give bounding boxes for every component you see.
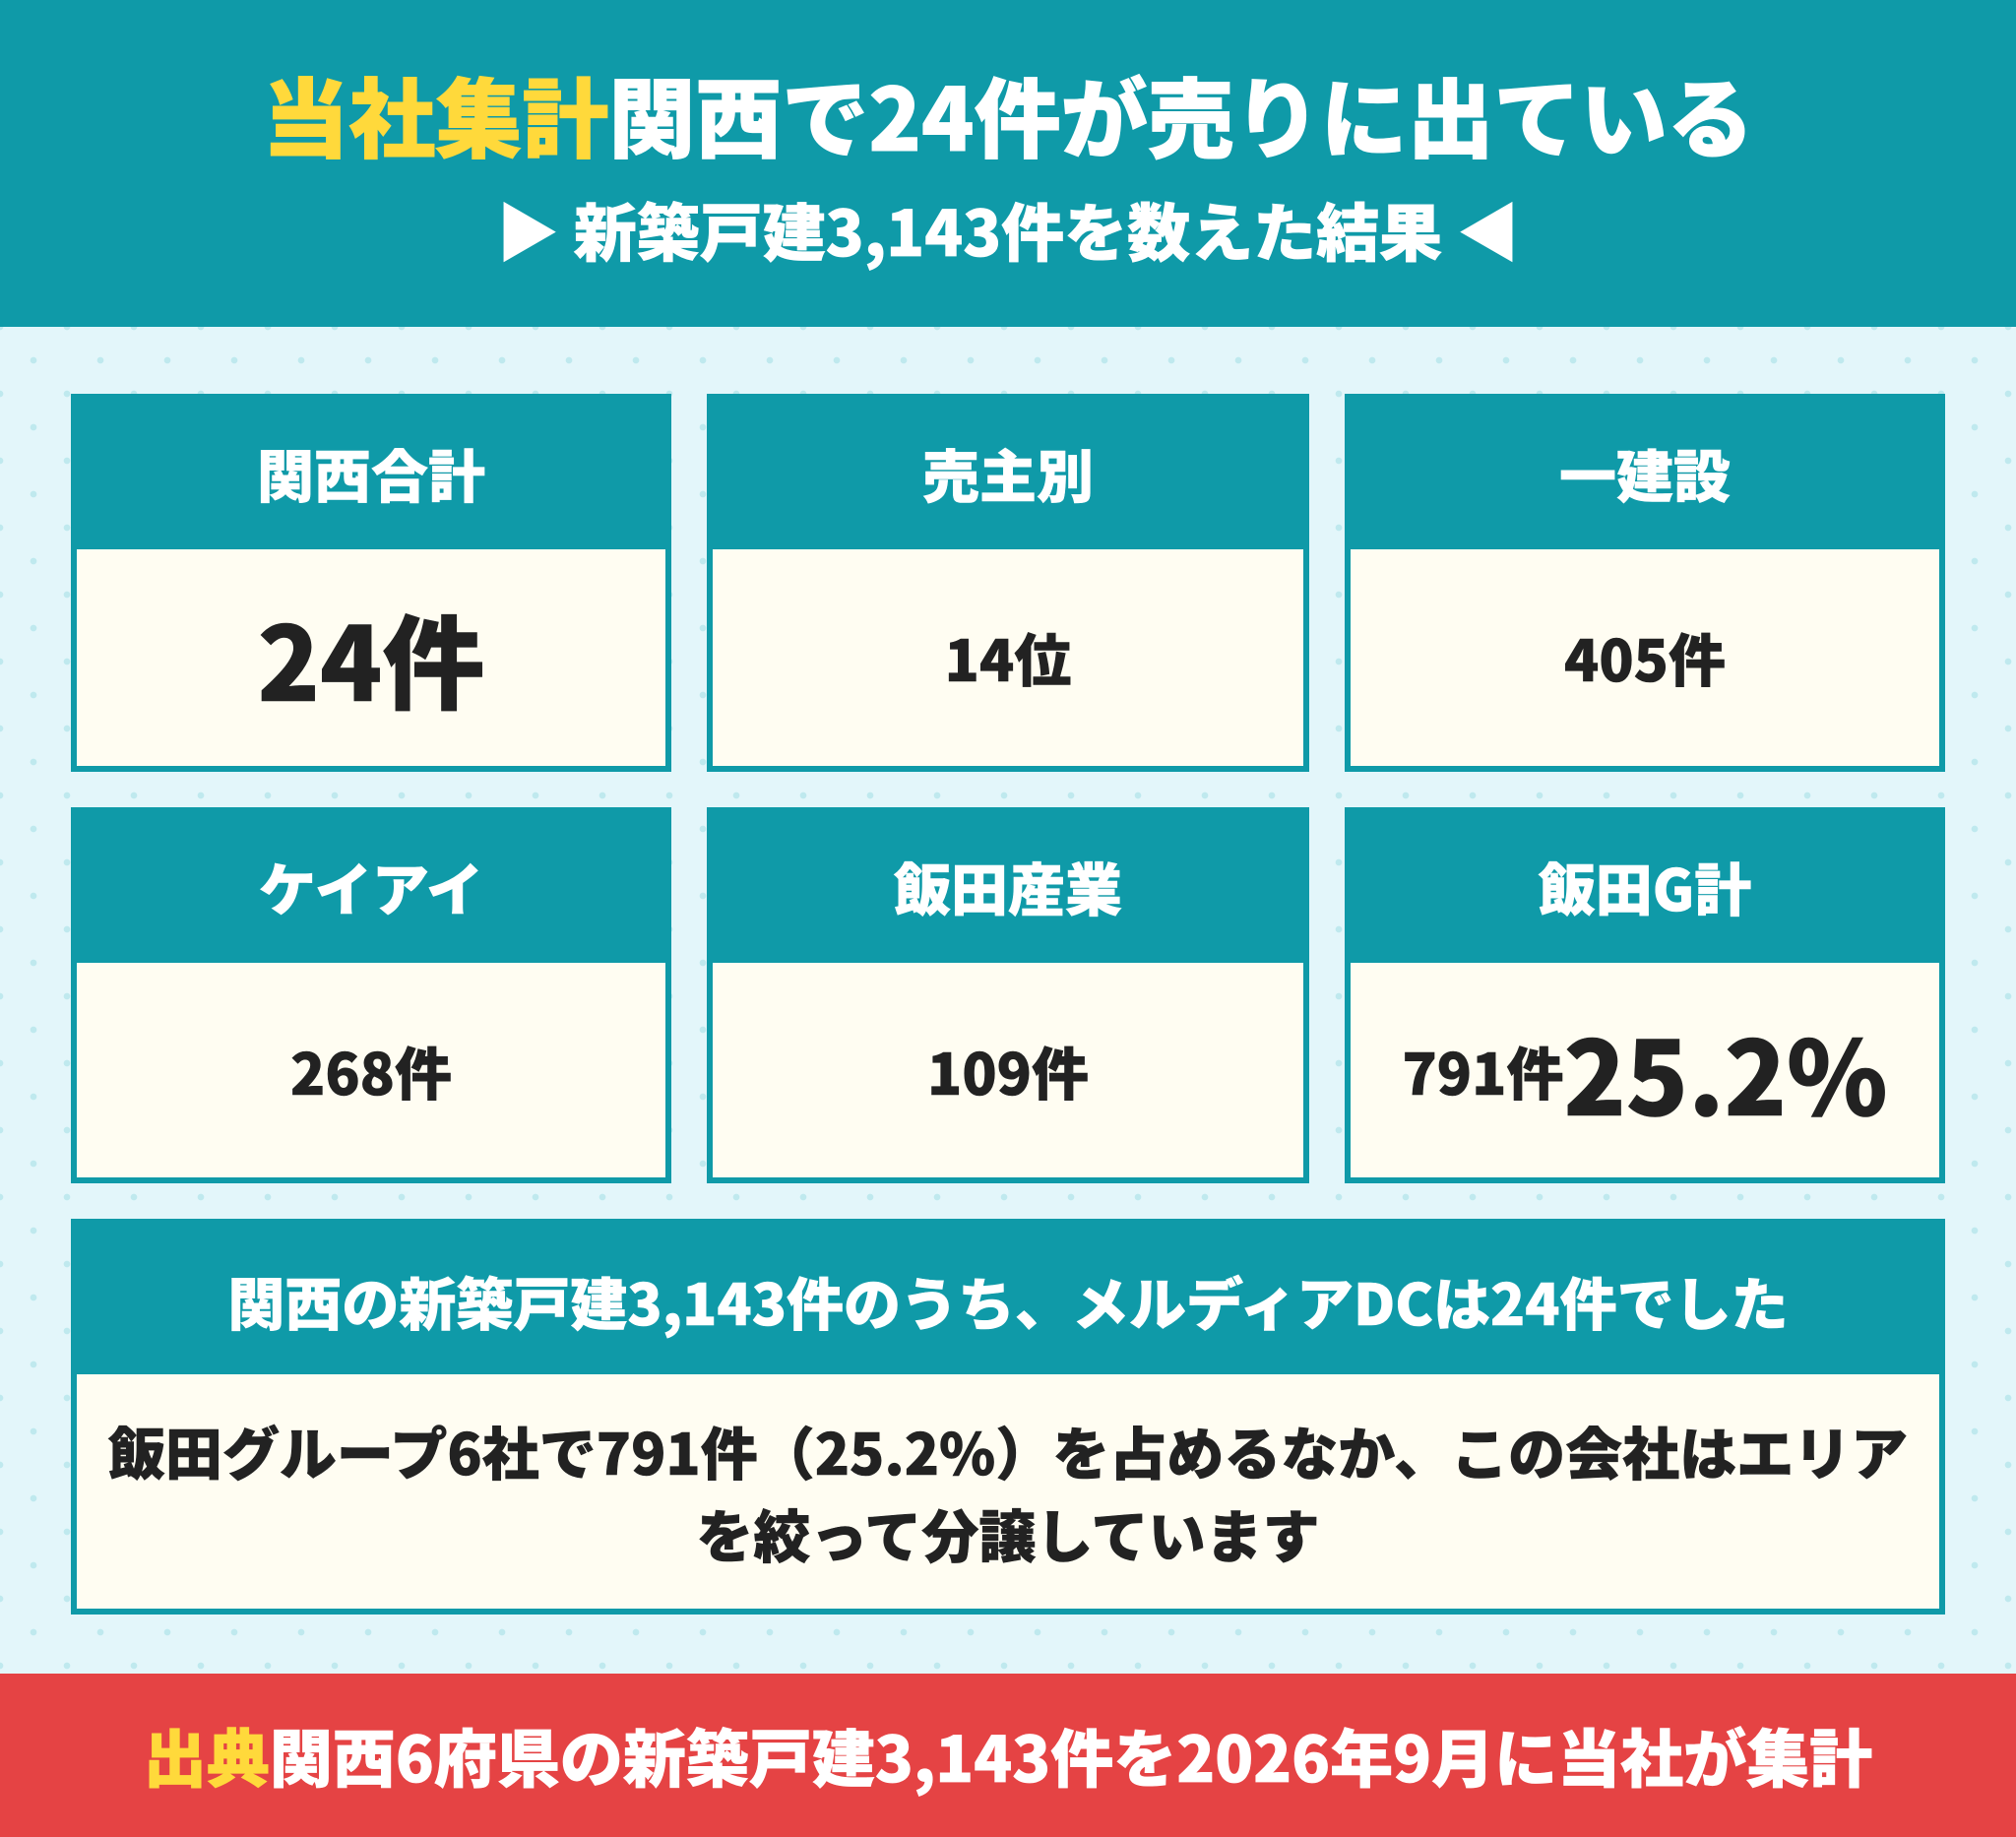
subtitle: ▶ 新築戸建3,143件を数えた結果 ◀: [496, 184, 1520, 275]
card heading: 関西合計: [257, 431, 485, 514]
card heading: [707, 394, 1309, 549]
card value: 268件: [290, 1029, 452, 1111]
summary text: 飯田グループ6社で791件（25.2%）を占めるなか、この会社はエリアを絞って分譲しています: [108, 1409, 1908, 1574]
card: 飯田産業: [707, 807, 1309, 1183]
card value: 791件: [1402, 1029, 1563, 1111]
card heading: ケイアイ: [259, 845, 483, 927]
card value: 109件: [927, 1029, 1089, 1111]
card heading: [1345, 394, 1945, 549]
summary panel: [71, 1219, 1945, 1615]
dotted background panel: [0, 327, 2016, 1674]
card heading: [707, 807, 1309, 963]
card value: 14位: [945, 615, 1071, 698]
card: 一建設: [1345, 394, 1945, 772]
card value: [1402, 996, 1888, 1144]
card heading: 一建設: [1559, 431, 1731, 514]
card value: 405件: [1564, 615, 1726, 698]
source text: 出典関西6府県の新築戸建3,143件を2026年9月に当社が集計: [144, 1710, 1872, 1801]
summary heading: [71, 1219, 1945, 1374]
card: ケイアイ: [71, 807, 671, 1183]
card heading: 飯田G計: [1539, 845, 1751, 927]
card: 飯田G計: [1345, 807, 1945, 1183]
card: 売主別: [707, 394, 1309, 772]
card heading: [71, 394, 671, 549]
card: 関西合計: [71, 394, 671, 772]
card heading: [1345, 807, 1945, 963]
card value: 24件: [258, 582, 484, 730]
title: 当社集計関西で24件が売りに出ている: [262, 51, 1754, 176]
card heading: [71, 807, 671, 963]
card heading: 売主別: [922, 431, 1094, 514]
source footer: [0, 1674, 2016, 1837]
card value: 25.2%: [1563, 996, 1888, 1144]
card heading: 飯田産業: [894, 845, 1122, 927]
summary heading: 関西の新築戸建3,143件のうち、メルディアDCは24件でした: [227, 1259, 1789, 1342]
header banner: [0, 0, 2016, 327]
